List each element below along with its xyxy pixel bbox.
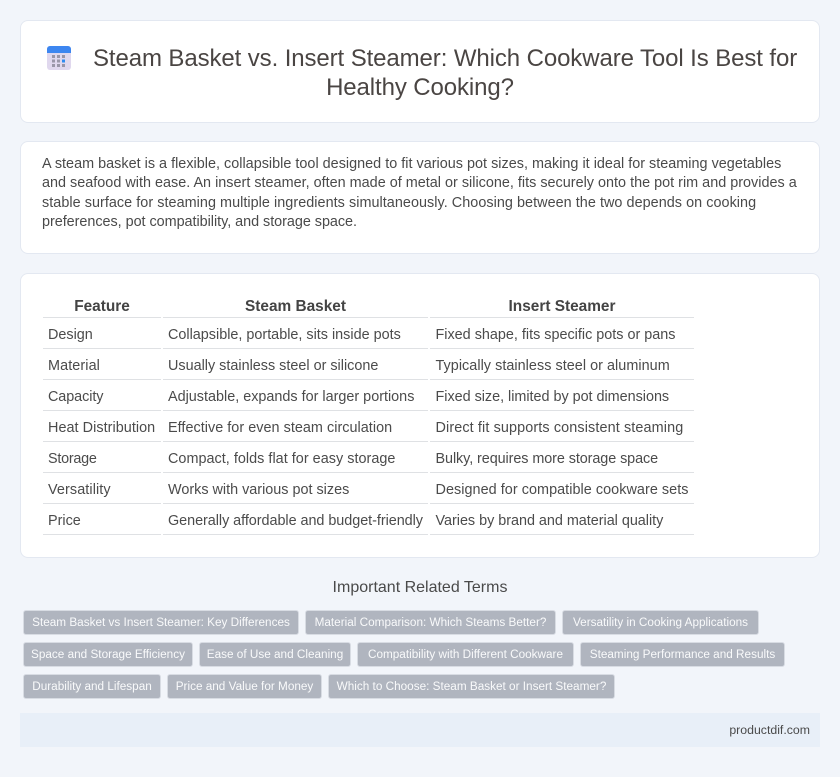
header: Feature: Feature bbox=[74, 298, 130, 315]
comparison table: Adjustable, expands for larger portions bbox=[168, 389, 414, 405]
title: Steam Basket vs. Insert Steamer: Which Cookware Tool Is Best for bbox=[93, 45, 797, 72]
tag: Material Comparison: Which Steams Better? bbox=[315, 616, 546, 629]
tag: Which to Choose: Steam Basket or Insert Steamer? bbox=[337, 680, 606, 693]
comparison table: Generally affordable and budget-friendly bbox=[168, 513, 423, 529]
comparison table: Fixed shape, fits specific pots or pans bbox=[436, 327, 675, 343]
tag: Steaming Performance and Results bbox=[590, 648, 775, 661]
tag bbox=[23, 642, 193, 667]
tag: Ease of Use and Cleaning bbox=[207, 648, 343, 661]
tag: Price and Value for Money bbox=[176, 680, 313, 693]
comparison table: Direct fit supports consistent steaming bbox=[436, 420, 683, 436]
intro paragraph: preferences, pot compatibility, and storage space. bbox=[42, 214, 357, 230]
tag: Versatility in Cooking Applications bbox=[573, 616, 748, 629]
header: Insert Steamer: Insert Steamer bbox=[509, 298, 615, 315]
comparison table: Compact, folds flat for easy storage bbox=[168, 451, 395, 467]
tag bbox=[580, 642, 785, 667]
row: Versatility: Versatility bbox=[48, 482, 111, 498]
title bbox=[93, 45, 797, 101]
panel: title card bbox=[20, 20, 820, 123]
comparison table: Effective for even steam circulation bbox=[168, 420, 392, 436]
tag: Steam Basket vs Insert Steamer: Key Differences bbox=[32, 616, 290, 629]
comparison table bbox=[43, 298, 694, 535]
row: Price: Price bbox=[48, 513, 81, 529]
tag: Durability and Lifespan bbox=[32, 680, 152, 693]
header: Steam Basket: Steam Basket bbox=[245, 298, 346, 315]
tag bbox=[167, 674, 322, 699]
row: Capacity: Capacity bbox=[48, 389, 103, 405]
comparison table: Varies by brand and material quality bbox=[436, 513, 663, 529]
intro paragraph: A steam basket is a flexible, collapsible tool designed to fit various pot sizes, making it ideal for steaming vegetables bbox=[42, 156, 781, 172]
row: Material: Material bbox=[48, 358, 100, 374]
comparison table: Usually stainless steel or silicone bbox=[168, 358, 378, 374]
row: Design: Design bbox=[48, 327, 93, 343]
tag bbox=[199, 642, 351, 667]
heading: related terms: Important Related Terms bbox=[333, 579, 507, 596]
tag bbox=[305, 610, 556, 635]
tag bbox=[23, 610, 299, 635]
tag bbox=[23, 674, 161, 699]
comparison table: Fixed size, limited by pot dimensions bbox=[436, 389, 669, 405]
footer source text: productdif.com bbox=[729, 723, 810, 737]
row: Storage: Storage bbox=[48, 451, 97, 467]
comparison table: Designed for compatible cookware sets bbox=[436, 482, 689, 498]
panel: comparison table card bbox=[20, 273, 820, 558]
tag: Space and Storage Efficiency bbox=[31, 648, 185, 661]
comparison table: Typically stainless steel or aluminum bbox=[436, 358, 670, 374]
row: Heat Distribution: Heat Distribution bbox=[48, 420, 155, 436]
comparison table: Bulky, requires more storage space bbox=[436, 451, 658, 467]
intro paragraph: stable surface for steaming multiple ingredients simultaneously. Choosing between the two depends on cooking bbox=[42, 195, 756, 211]
title: Healthy Cooking? bbox=[326, 74, 514, 101]
comparison table: Works with various pot sizes bbox=[168, 482, 349, 498]
panel: intro text card bbox=[20, 141, 820, 254]
tag bbox=[328, 674, 615, 699]
tag list bbox=[23, 610, 785, 699]
comparison table: Collapsible, portable, sits inside pots bbox=[168, 327, 401, 343]
tag: Compatibility with Different Cookware bbox=[368, 648, 563, 661]
footer bar bbox=[20, 713, 820, 747]
intro paragraph: and seafood with ease. An insert steamer, often made of metal or silicone, fits securely onto the pot rim and provides a bbox=[42, 175, 797, 191]
tag bbox=[357, 642, 574, 667]
intro paragraph bbox=[42, 156, 797, 230]
tag bbox=[562, 610, 759, 635]
icon: calendar bbox=[47, 46, 71, 70]
